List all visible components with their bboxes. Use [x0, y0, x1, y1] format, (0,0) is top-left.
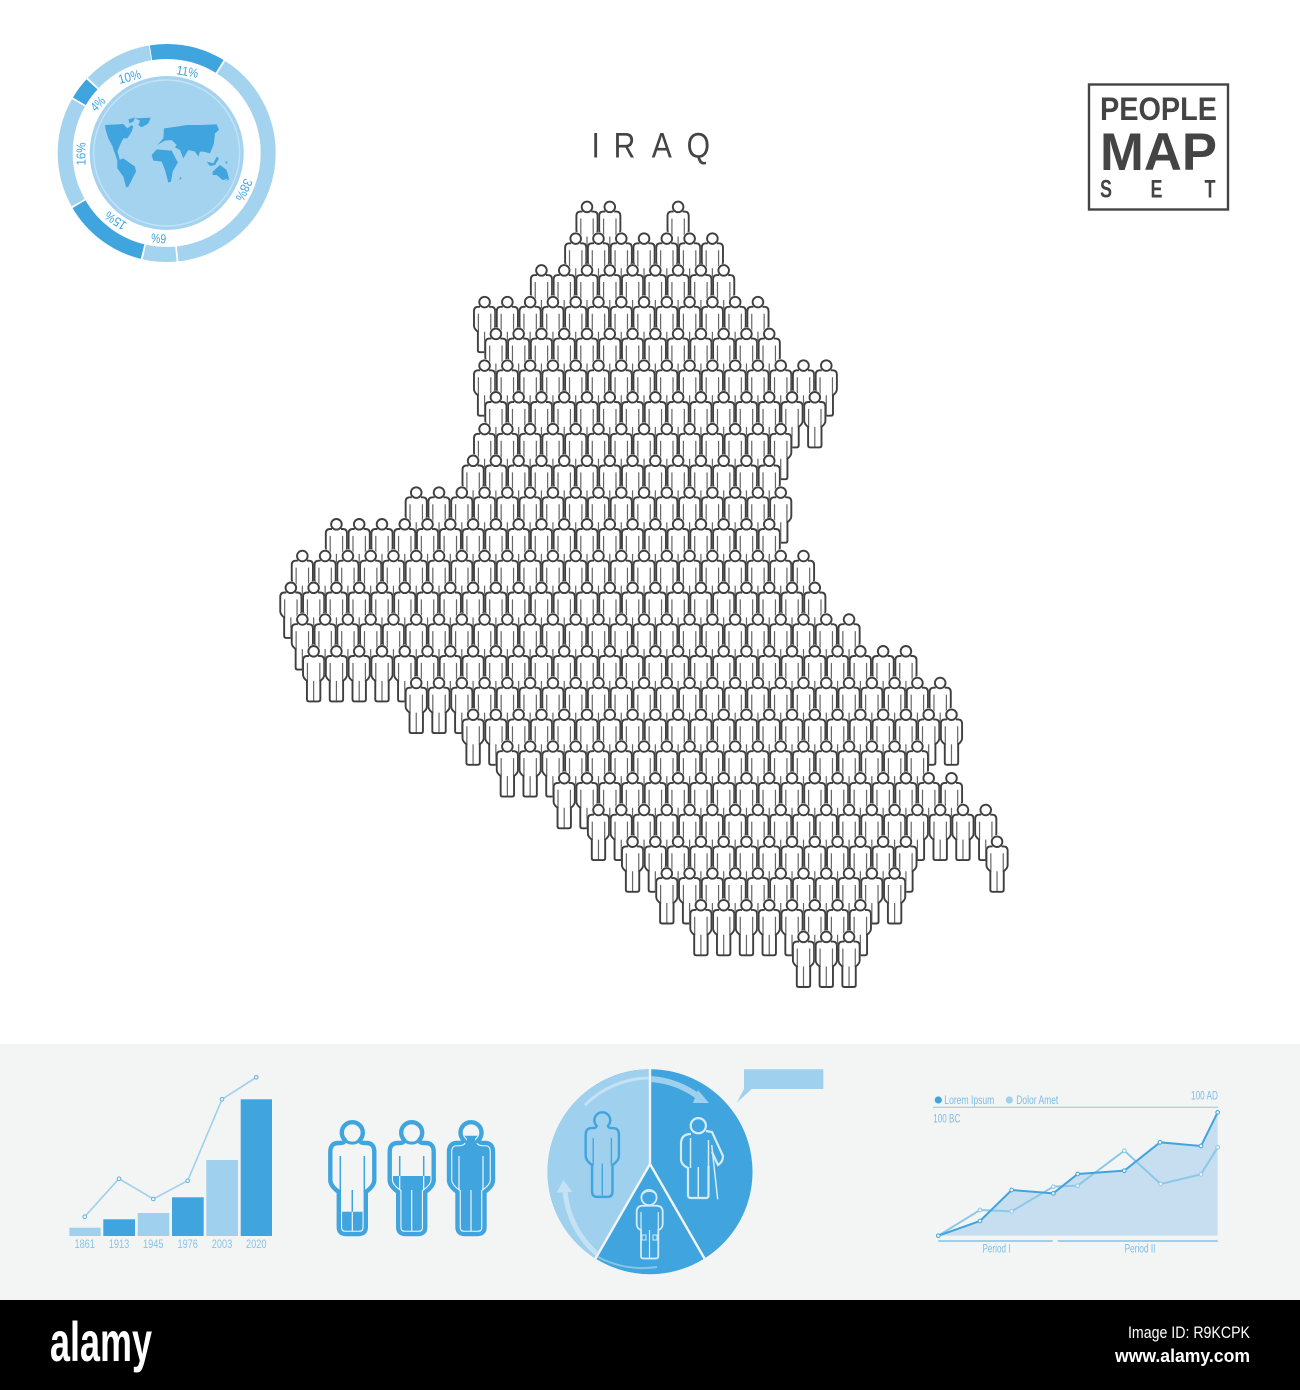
year labels: 1913 [109, 1239, 129, 1251]
percentage labels: 6% [150, 230, 167, 247]
line chart panel: 100 AD [1191, 1091, 1218, 1103]
year labels: 1945 [143, 1239, 164, 1251]
pie dividers [596, 1069, 704, 1258]
world map [105, 117, 229, 187]
title: IRAQ [592, 125, 710, 165]
bottom band [0, 1044, 1300, 1300]
person icon: low fill [328, 1120, 376, 1236]
percentage labels: 11% [175, 62, 200, 81]
footer bar: www.alamy.com [1114, 1346, 1250, 1366]
footer bar: Image ID: R9KCPK [1128, 1323, 1251, 1342]
callout [737, 1069, 823, 1103]
legend [935, 1095, 1059, 1107]
people map badge: MAP [1100, 123, 1217, 182]
person icon: full fill [446, 1120, 496, 1236]
child icon [637, 1190, 663, 1258]
year labels: 1861 [74, 1239, 95, 1251]
percentage labels: 4% [87, 93, 109, 114]
year labels [74, 1239, 267, 1251]
area and series [936, 1110, 1219, 1237]
percentage labels: 15% [101, 208, 129, 233]
people map badge: PEOPLE [1100, 91, 1217, 127]
year labels: 1976 [177, 1239, 198, 1251]
footer bar: alamy [50, 1310, 152, 1373]
trend line [85, 1077, 256, 1217]
cycle arrows [565, 1078, 699, 1268]
people map badge: SET [1100, 174, 1216, 203]
percentage labels: 16% [74, 142, 89, 166]
percentage labels: 10% [116, 66, 143, 87]
year labels: 2003 [212, 1239, 232, 1251]
person icon: mid fill [388, 1120, 436, 1236]
globe disc [90, 76, 244, 230]
donut chart with world map [65, 51, 268, 254]
line chart panel: Period I [982, 1243, 1010, 1255]
line chart panel: Period II [1124, 1243, 1156, 1255]
line chart panel: 100 BC [933, 1113, 960, 1125]
ring segments [65, 51, 268, 254]
elderly icon [681, 1118, 723, 1199]
legend: Dolor Amet [1016, 1095, 1059, 1107]
pie chart: age groups [547, 1069, 752, 1274]
adult icon [586, 1112, 619, 1197]
percentage labels: 38% [232, 176, 256, 204]
people map badge [1089, 84, 1228, 210]
bar chart with trend line [69, 1076, 272, 1251]
period axis [938, 1240, 1218, 1242]
year labels: 2020 [246, 1239, 267, 1251]
people map of Iraq [280, 202, 1008, 987]
percentage labels [74, 62, 256, 247]
footer bar [0, 1300, 1300, 1390]
legend: Lorem Ipsum [944, 1095, 994, 1107]
line chart panel [933, 1091, 1219, 1255]
